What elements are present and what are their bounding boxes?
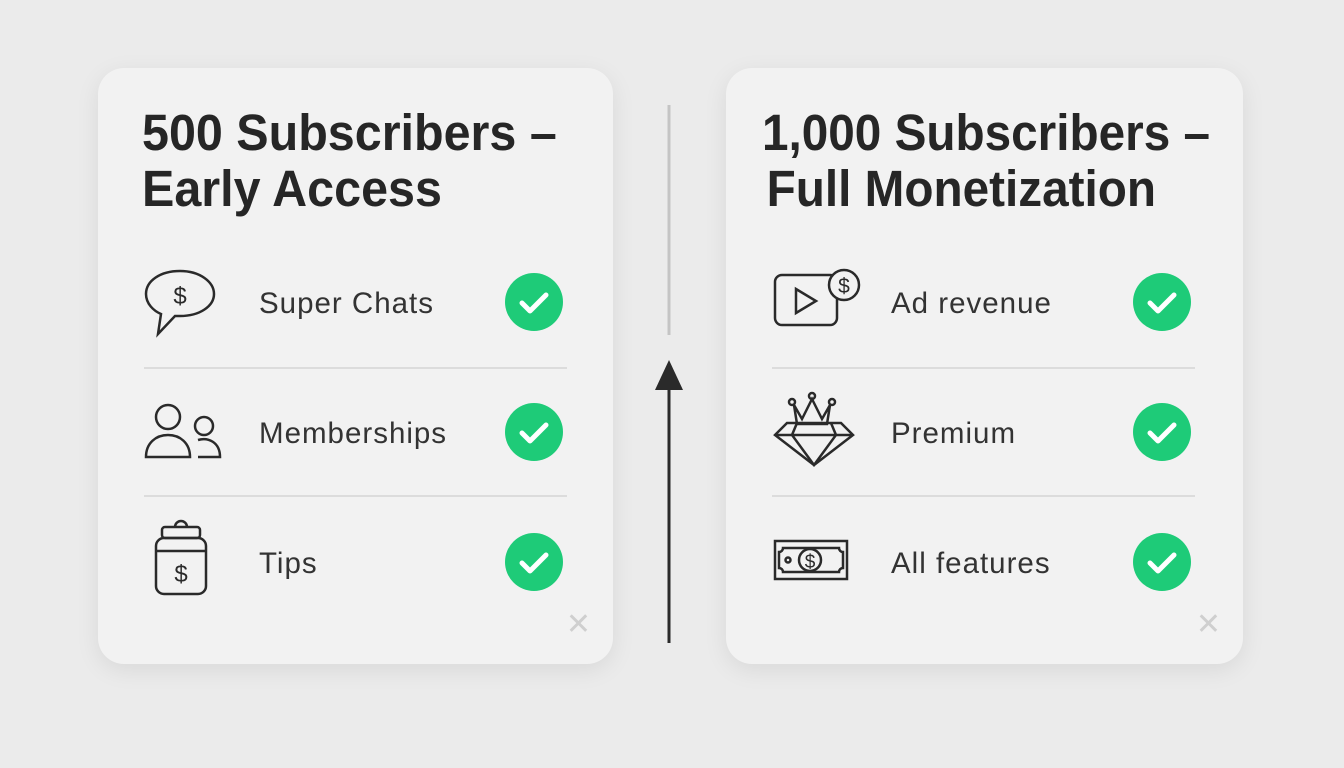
icon: banknote: $ xyxy=(805,552,816,573)
row: all features: All features xyxy=(891,547,1051,580)
icon: speech bubble: $ xyxy=(173,283,187,310)
row: memberships: Memberships xyxy=(259,417,447,450)
row: premium xyxy=(773,392,1191,467)
row: ad revenue: Ad revenue xyxy=(891,287,1052,320)
panel: 1000 subscribers xyxy=(726,68,1243,664)
icon: speech bubble xyxy=(144,270,216,338)
icon: video dollar xyxy=(774,268,860,326)
row: ad revenue xyxy=(774,268,1191,331)
close mark: ✕ xyxy=(1196,608,1221,641)
check icon xyxy=(1133,533,1191,591)
row: tips: Tips xyxy=(259,547,318,580)
row: all features xyxy=(774,533,1191,591)
icon: people xyxy=(144,404,222,458)
row: super chats xyxy=(144,270,563,338)
title right xyxy=(762,104,1210,217)
row: super chats: Super Chats xyxy=(259,287,434,320)
check icon xyxy=(505,403,563,461)
row: tips xyxy=(154,520,563,596)
title right: Full Monetization xyxy=(767,160,1156,217)
icon: jar xyxy=(154,520,208,596)
check icon xyxy=(1133,273,1191,331)
panel: 500 subscribers xyxy=(98,68,613,664)
icon: video dollar: $ xyxy=(838,275,850,298)
title left: 500 Subscribers – xyxy=(142,104,557,161)
close mark: ✕ xyxy=(566,608,591,641)
title right: 1,000 Subscribers – xyxy=(762,104,1210,161)
check icon xyxy=(1133,403,1191,461)
row: premium: Premium xyxy=(891,417,1016,450)
check icon xyxy=(505,533,563,591)
icon: banknote xyxy=(774,540,848,580)
icon: diamond crown xyxy=(773,392,855,467)
title left: Early Access xyxy=(142,160,442,217)
row: memberships xyxy=(144,403,563,461)
arrow: upward progression xyxy=(655,105,683,643)
check icon xyxy=(505,273,563,331)
title left xyxy=(142,104,557,217)
icon: jar: $ xyxy=(174,561,188,588)
